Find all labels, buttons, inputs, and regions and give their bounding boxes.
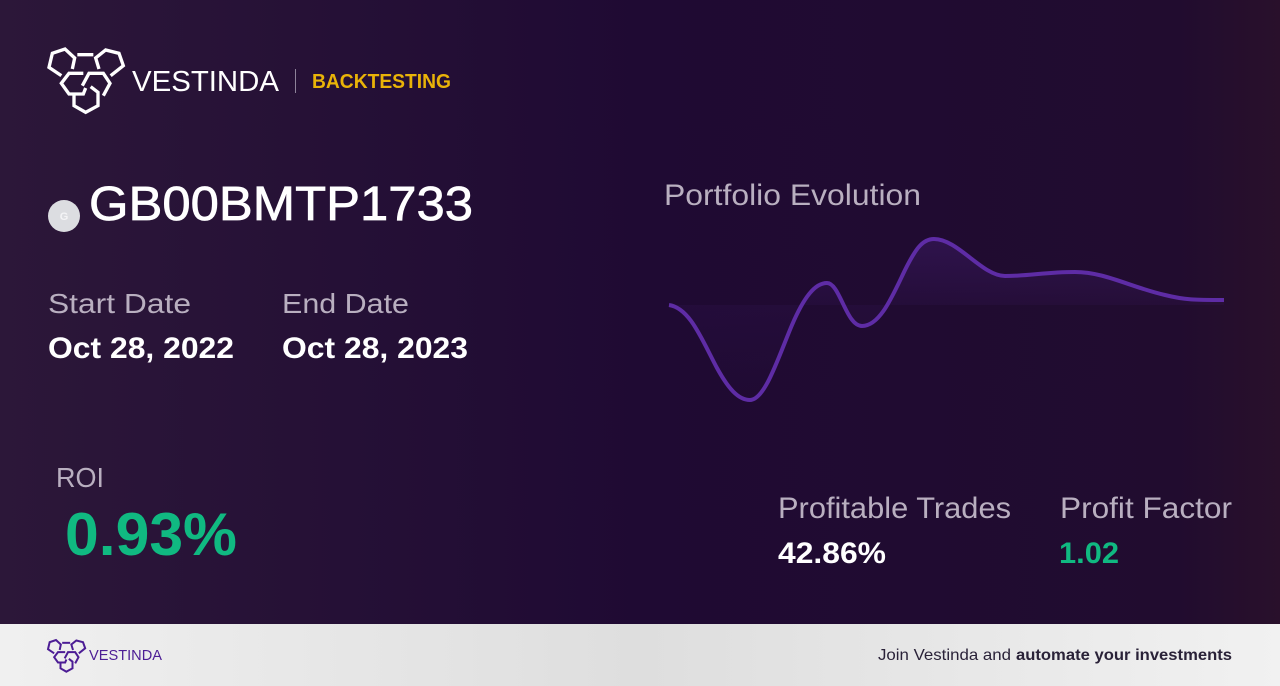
chart heading: Portfolio Evolution xyxy=(664,179,921,212)
ROI metric: ROI xyxy=(56,462,104,493)
end date: End Date xyxy=(282,288,409,319)
header logo xyxy=(49,49,280,112)
start date xyxy=(48,288,234,365)
icon: Vestinda hexagon mark xyxy=(49,49,123,112)
logo wordmark: VESTINDA xyxy=(132,66,280,98)
profit factor metric xyxy=(1059,492,1232,570)
portfolio evolution area chart xyxy=(669,239,1224,400)
asset title xyxy=(48,178,473,232)
start date: Start Date xyxy=(48,288,191,319)
footer bar xyxy=(0,624,1280,686)
ROI metric: 0.93% xyxy=(65,501,237,568)
footer call to action: automate your investments xyxy=(1016,647,1232,664)
asset name: GB00BMTP1733 xyxy=(89,178,473,231)
ROI metric xyxy=(56,462,237,568)
icon: asset badge: G xyxy=(60,211,68,223)
profitable trades metric: 42.86% xyxy=(778,537,886,570)
profit factor metric: Profit Factor xyxy=(1060,492,1232,525)
start date: Oct 28, 2022 xyxy=(48,332,234,365)
divider xyxy=(295,69,296,93)
footer logo xyxy=(48,640,162,672)
icon: asset badge xyxy=(48,200,80,232)
profitable trades metric: Profitable Trades xyxy=(778,492,1011,525)
footer call to action xyxy=(878,647,1232,664)
profitable trades metric xyxy=(778,492,1011,570)
footer wordmark: VESTINDA xyxy=(89,647,162,664)
profit factor metric: 1.02 xyxy=(1059,537,1119,570)
heading: backtesting: BACKTESTING xyxy=(312,71,451,93)
end date: Oct 28, 2023 xyxy=(282,332,468,365)
footer call to action: Join Vestinda and xyxy=(878,647,1011,664)
end date xyxy=(282,288,468,365)
icon: footer hexagon mark xyxy=(48,640,85,672)
